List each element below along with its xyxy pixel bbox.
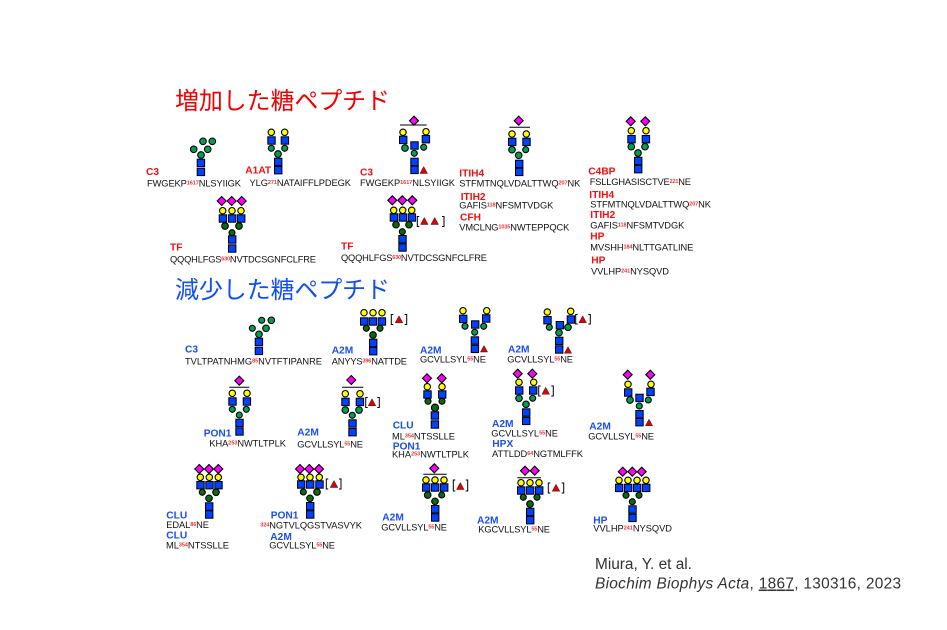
label: C4BP ITIH4 ITIH2 HP HP: GAFIS (590, 221, 618, 231)
label: TF second (341, 241, 487, 263)
label: C3 TVLTPAT: 85 (252, 358, 258, 364)
label: A2M GCVLLSYL (420, 346, 486, 364)
label: C4BP ITIH4 ITIH2 HP HP: NE (678, 177, 691, 187)
glycan: CLU PON1 (422, 374, 446, 428)
label: A1AT YLG (245, 165, 352, 188)
label: A2M GCVLLSYL: GCVLLSYL (420, 354, 467, 364)
label: A2M GCVLLSYL: 55 (467, 356, 473, 362)
label: A2M GCVLLSYL second: NE (560, 354, 573, 364)
label: ITIH4 ITIH2 CFH: NFSMTVDGK (496, 201, 554, 211)
label: CLU PON1: CLU (393, 421, 414, 432)
glycan: PON1 A2M trisialo (296, 464, 341, 518)
glycan: A2M tri-antennary monosialo (422, 464, 468, 521)
label: TF second: QQQHLFGS (341, 253, 392, 263)
label: PON1 A2M: GCVLLSYL (269, 541, 316, 551)
label: C4BP ITIH4 ITIH2 HP HP: C4BP (588, 166, 616, 177)
glycan: C3 high mannose (249, 317, 275, 355)
glycan: A2M far right (623, 370, 655, 426)
label: TF: NVTDCSGNFCLFRE (230, 254, 316, 264)
glycan: A2M bisected fucosylated (460, 308, 490, 353)
label: C4BP ITIH4 ITIH2 HP HP: 207 (689, 202, 698, 208)
label: ITIH4 ITIH2 CFH: NK (567, 178, 581, 188)
label: TF second: TF (341, 241, 353, 252)
label: CLU EDAL and ML: NE (196, 520, 209, 530)
label: A2M HPX: HPX (492, 439, 513, 450)
glycan: A1AT (268, 129, 289, 174)
label: C3 FWGEKP (146, 167, 242, 188)
label: TF: QQQHLFGS (170, 254, 221, 264)
citation: Miura, Y. et al. (595, 556, 692, 573)
label: A2M far right: GCVLLSYL (588, 431, 635, 441)
label: ITIH4 ITIH2 CFH (459, 169, 581, 232)
citation: Biochim Biophys Acta, 1867, 130316, 2023 (595, 576, 901, 592)
label: A1AT YLG: A1AT (245, 165, 272, 176)
label: A2M GCVLLSYL fourth: 55 (428, 524, 434, 530)
label: A2M ANYYS (332, 346, 407, 366)
label: C3 TVLTPAT: TVLTPATNHMG (185, 356, 252, 366)
label: A2M GCVLLSYL second: A2M (508, 345, 530, 356)
label: ITIH4 ITIH2 CFH: 207 (559, 180, 568, 186)
label: ITIH4 ITIH2 CFH: STFMTNQLVDALTTWQ (459, 178, 559, 188)
label: A2M GCVLLSYL fourth: A2M (382, 513, 404, 524)
label: HP VVLHP: 241 (624, 526, 633, 532)
label: A2M GCVLLSYL second: GCVLLSYL (507, 354, 554, 364)
label: A2M HPX: ATTLDD (492, 449, 527, 459)
label: A2M GCVLLSYL third: NE (350, 439, 363, 449)
label: PON1 KHA: KHA (209, 439, 228, 449)
label: CLU EDAL and ML: CLU (166, 511, 187, 522)
label: PON1 A2M: PON1 (271, 511, 299, 522)
label: HP VVLHP: HP (593, 515, 608, 526)
citation (595, 556, 901, 592)
label: A2M ANYYS: A2M (332, 346, 353, 357)
label: A2M far right: 55 (635, 433, 641, 439)
label: CLU EDAL and ML: 354 (179, 543, 189, 549)
label: CLU EDAL and ML: CLU (166, 531, 187, 542)
label: A1AT YLG: YLG (250, 178, 268, 188)
label: ITIH4 ITIH2 CFH: 1035 (498, 224, 510, 230)
glycan: C4BP group (626, 117, 650, 173)
glycan: ITIH4 group (508, 116, 530, 176)
label: CLU EDAL and ML (166, 511, 229, 551)
label: CLU PON1: PON1 (393, 441, 421, 452)
label: CLU PON1: NTSSLLE (414, 431, 455, 441)
label: A2M ANYYS: 396 (362, 358, 371, 364)
label: CLU EDAL and ML: ML (166, 541, 179, 551)
label: C3 FWGEKP second (360, 167, 456, 188)
label: C4BP ITIH4 ITIH2 HP HP: NFSMTVDGK (627, 221, 685, 231)
label: ITIH4 ITIH2 CFH: ITIH2 (461, 192, 486, 203)
label: CLU PON1 (392, 421, 470, 460)
label: C3 FWGEKP second: C3 (360, 167, 373, 178)
label: CLU EDAL and ML: EDAL (166, 520, 190, 530)
label: CLU PON1: ML (392, 431, 405, 441)
label: A2M HPX: 55 (539, 431, 545, 437)
label: CLU PON1: 354 (405, 433, 415, 439)
label: A1AT YLG: 271 (268, 180, 277, 186)
label: C3 FWGEKP: 1617 (187, 180, 199, 186)
glycan: CLU trisialo (195, 464, 223, 518)
label: TF: TF (170, 243, 182, 254)
label: A2M GCVLLSYL third: A2M (297, 428, 319, 439)
panel: increased glycopeptides (146, 116, 712, 277)
label: A1AT YLG: NATAIFFLPDEGK (277, 178, 352, 188)
label: C4BP ITIH4 ITIH2 HP HP: NLTTGATLINE (632, 242, 693, 252)
label: C4BP ITIH4 ITIH2 HP HP: HP (591, 256, 606, 267)
label: C4BP ITIH4 ITIH2 HP HP: ITIH2 (590, 210, 616, 221)
label: A2M ANYYS: ANYYS (332, 356, 363, 366)
label: HP VVLHP: NYSQVD (633, 524, 672, 534)
label: C4BP ITIH4 ITIH2 HP HP: HP (590, 232, 605, 243)
glycan: A2M triantennary (360, 310, 407, 355)
label: CLU EDAL and ML: 86 (190, 522, 196, 528)
glycan: A2M tri-antennary disialo (517, 466, 564, 524)
heading: decreased glycopeptides: 減少した糖ペプチド (175, 277, 390, 304)
label: C4BP ITIH4 ITIH2 HP HP: VVLHP (591, 267, 621, 277)
label: PON1 A2M: A2M (270, 532, 292, 543)
label: A2M GCVLLSYL second: 55 (554, 356, 560, 362)
label: C3 FWGEKP: NLSYIIGK (199, 178, 242, 188)
glycan: PON1 (229, 376, 251, 435)
label: A2M KGCVLLSYL: A2M (477, 516, 499, 527)
label: C4BP ITIH4 ITIH2 HP HP: ITIH4 (589, 190, 615, 201)
label: TF second: NVTDCSGNFCLFRE (401, 253, 487, 263)
label: ITIH4 ITIH2 CFH: ITIH4 (459, 169, 485, 180)
label: A2M HPX (491, 419, 584, 459)
label: C3 TVLTPAT (185, 345, 322, 366)
label: TF: 630 (221, 256, 230, 262)
label: A2M GCVLLSYL second (507, 345, 573, 364)
label: C4BP ITIH4 ITIH2 HP HP: 184 (623, 244, 633, 250)
glycan: TF trisialo (217, 196, 246, 252)
label: A2M KGCVLLSYL: NE (537, 525, 550, 535)
label: A2M KGCVLLSYL: KGCVLLSYL (478, 525, 531, 535)
label: PON1 A2M: 324 (260, 523, 270, 529)
glycan: TF trisialo difucosyl (388, 196, 444, 251)
glycan: A2M sialylated fucosylated (342, 376, 379, 436)
label: HP VVLHP: VVLHP (593, 524, 624, 534)
label: PON1 A2M: NE (322, 541, 335, 551)
label: ITIH4 ITIH2 CFH: 118 (487, 203, 496, 209)
label: CLU EDAL and ML: NTSSLLE (188, 541, 229, 551)
label: C3 FWGEKP second: NLSYIIGK (412, 178, 456, 188)
label: C3 FWGEKP second: 1617 (400, 180, 412, 186)
label: CLU PON1: KHA (392, 450, 411, 460)
label: ITIH4 ITIH2 CFH: VMCLNG (459, 222, 499, 232)
label: C4BP ITIH4 ITIH2 HP HP: NYSQVD (630, 267, 669, 277)
glycan: C3 bisected sialylated fucosylated (400, 116, 430, 174)
label: C4BP ITIH4 ITIH2 HP HP: FSLLGHASISCTVE (590, 177, 670, 187)
label: PON1 KHA (204, 429, 287, 449)
label: A2M GCVLLSYL third (297, 428, 363, 449)
label: C3 TVLTPAT: C3 (185, 345, 198, 356)
label: PON1 KHA: 253 (228, 441, 237, 447)
label: A2M HPX: GCVLLSYL (491, 429, 539, 439)
glycan: A2M HPX (513, 369, 553, 425)
label: C4BP ITIH4 ITIH2 HP HP: STFMTNQLVDALTTWQ (590, 200, 689, 210)
label: A2M KGCVLLSYL: 55 (531, 527, 537, 533)
label: A2M HPX: NGTMLFFK (533, 449, 584, 459)
label: HP VVLHP (593, 515, 672, 534)
label: C4BP ITIH4 ITIH2 HP HP: 221 (670, 179, 678, 185)
label: C4BP ITIH4 ITIH2 HP HP: 118 (618, 223, 627, 229)
heading: increased glycopeptides: 増加した糖ペプチド (175, 88, 390, 115)
label: C3 TVLTPAT: NVTFTIPANRE (258, 356, 322, 366)
label: PON1 A2M (260, 511, 363, 551)
label: C4BP ITIH4 ITIH2 HP HP (588, 166, 712, 277)
label: A2M GCVLLSYL fourth (381, 513, 447, 532)
glycan: C3 high mannose (190, 138, 216, 176)
label: A2M GCVLLSYL third: 55 (344, 441, 350, 447)
label: CLU PON1: NWTLTPLK (420, 450, 470, 460)
glycan: HP tetra-antennary (616, 467, 650, 522)
label: A2M HPX: A2M (492, 419, 514, 430)
label: A2M far right (588, 421, 654, 441)
label: A2M far right: A2M (589, 421, 611, 432)
label: C4BP ITIH4 ITIH2 HP HP: MVSHH (590, 242, 624, 252)
label: ITIH4 ITIH2 CFH: GAFIS (459, 201, 487, 211)
label: C4BP ITIH4 ITIH2 HP HP: 241 (621, 269, 630, 275)
label: A2M GCVLLSYL: NE (473, 354, 486, 364)
label: TF (170, 243, 316, 264)
glycan: A2M bisected difucosylated (544, 308, 590, 353)
label: A2M KGCVLLSYL (477, 516, 550, 535)
label: A2M GCVLLSYL fourth: GCVLLSYL (381, 522, 428, 532)
label: PON1 KHA: PON1 (204, 429, 232, 440)
label: C3 FWGEKP second: FWGEKP (360, 178, 400, 188)
label: A2M GCVLLSYL: A2M (420, 346, 442, 357)
label: A2M GCVLLSYL third: GCVLLSYL (297, 439, 344, 449)
label: A2M ANYYS: NATTDE (371, 356, 407, 366)
label: A2M HPX: NE (545, 429, 558, 439)
label: CLU PON1: 253 (411, 452, 420, 458)
label: A2M GCVLLSYL fourth: NE (434, 522, 447, 532)
label: C3 FWGEKP: FWGEKP (147, 178, 187, 188)
label: ITIH4 ITIH2 CFH: CFH (460, 213, 481, 224)
label: PON1 KHA: NWTLTPLK (237, 439, 287, 449)
label: PON1 A2M: 55 (316, 543, 322, 549)
label: A2M far right: NE (641, 431, 654, 441)
label: PON1 A2M: NGTVLQGSTVASVYK (269, 521, 363, 531)
label: A2M HPX: 64 (527, 451, 534, 457)
label: TF second: 630 (392, 255, 401, 261)
label: ITIH4 ITIH2 CFH: NWTEPPQCK (510, 222, 570, 232)
label: C3 FWGEKP: C3 (146, 167, 159, 178)
panel: decreased glycopeptides (166, 308, 672, 551)
label: C4BP ITIH4 ITIH2 HP HP: NK (698, 200, 712, 210)
